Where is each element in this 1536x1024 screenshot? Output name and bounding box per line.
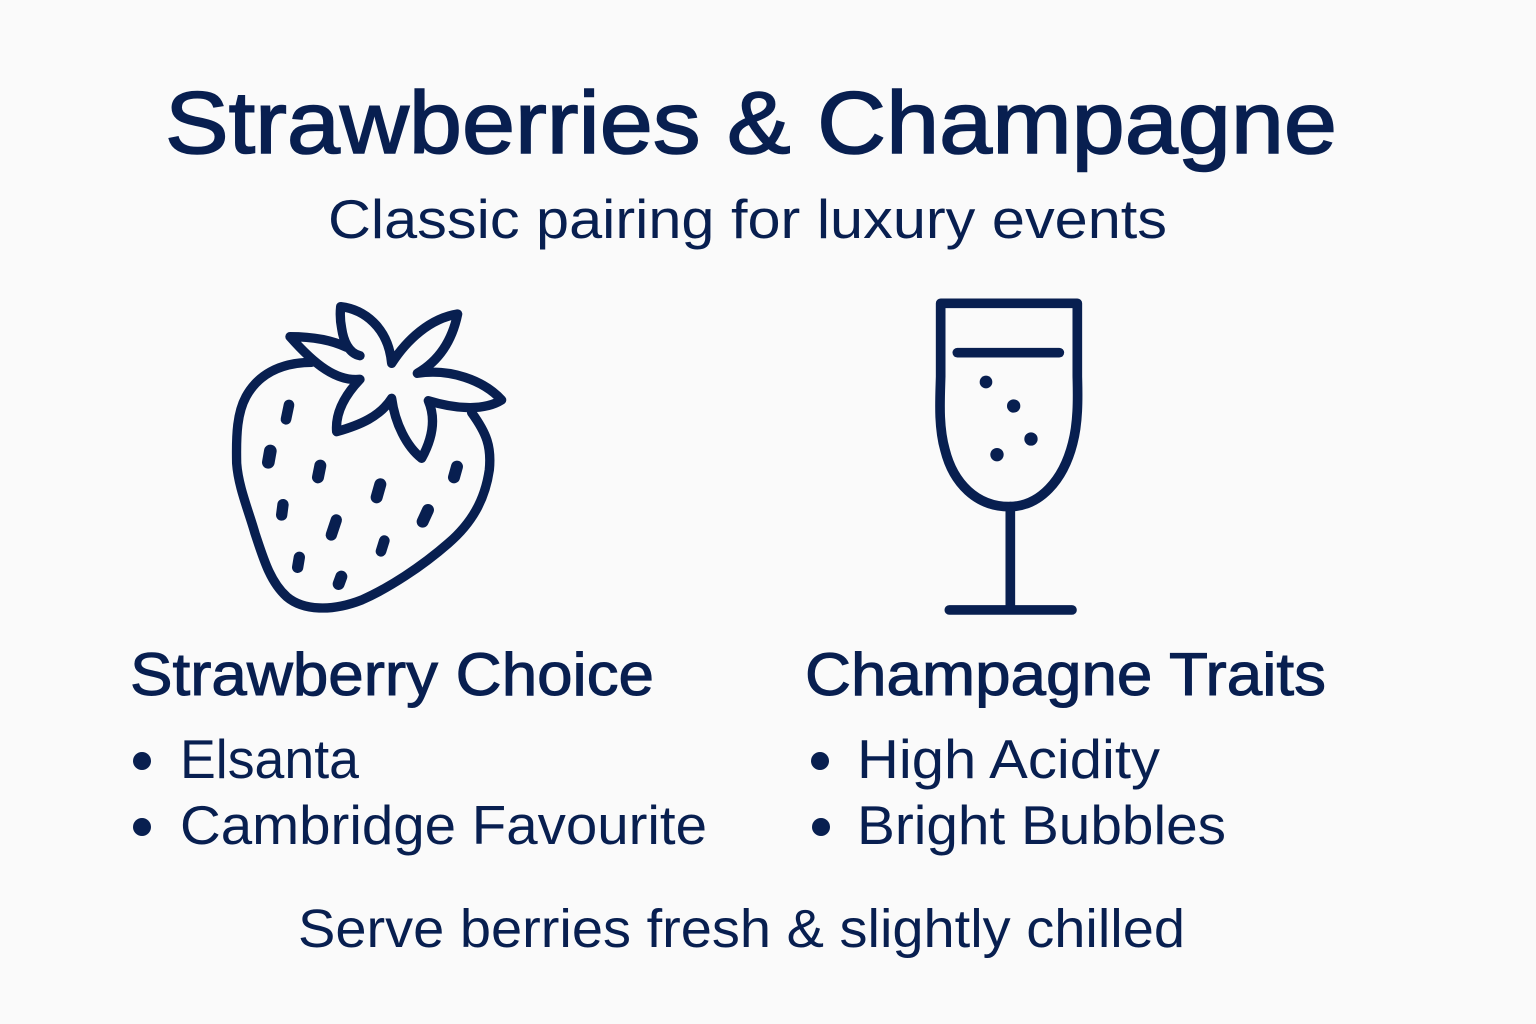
- footer note: Serve berries fresh & slightly chilled: [298, 899, 1185, 959]
- strawberry seeds: [268, 405, 457, 584]
- bubbles: [980, 376, 1038, 461]
- bullet: [133, 818, 151, 836]
- list item: Elsanta: [180, 728, 359, 790]
- bullet: [133, 752, 151, 770]
- heading: Champagne Traits: [805, 641, 1326, 708]
- bullet: [811, 752, 829, 770]
- panel: strawberry choice: [130, 641, 707, 856]
- heading: Strawberry Choice: [130, 641, 654, 708]
- base: [949, 595, 1072, 624]
- icon: champagne glass: [940, 303, 1078, 610]
- glass bowl: [940, 303, 1078, 507]
- subtitle: Classic pairing for luxury events: [328, 188, 1167, 250]
- list item: Cambridge Favourite: [180, 794, 707, 856]
- icon: strawberry: [237, 307, 502, 608]
- list item: Bright Bubbles: [857, 794, 1226, 856]
- strawberry body: [237, 362, 490, 608]
- title: Strawberries & Champagne: [165, 73, 1337, 172]
- strawberry leaves: [290, 307, 502, 458]
- wine level line: [957, 338, 1059, 367]
- stem: [996, 507, 1025, 609]
- panel: champagne traits: [805, 641, 1326, 856]
- list item: High Acidity: [857, 728, 1161, 790]
- bullet: [812, 818, 830, 836]
